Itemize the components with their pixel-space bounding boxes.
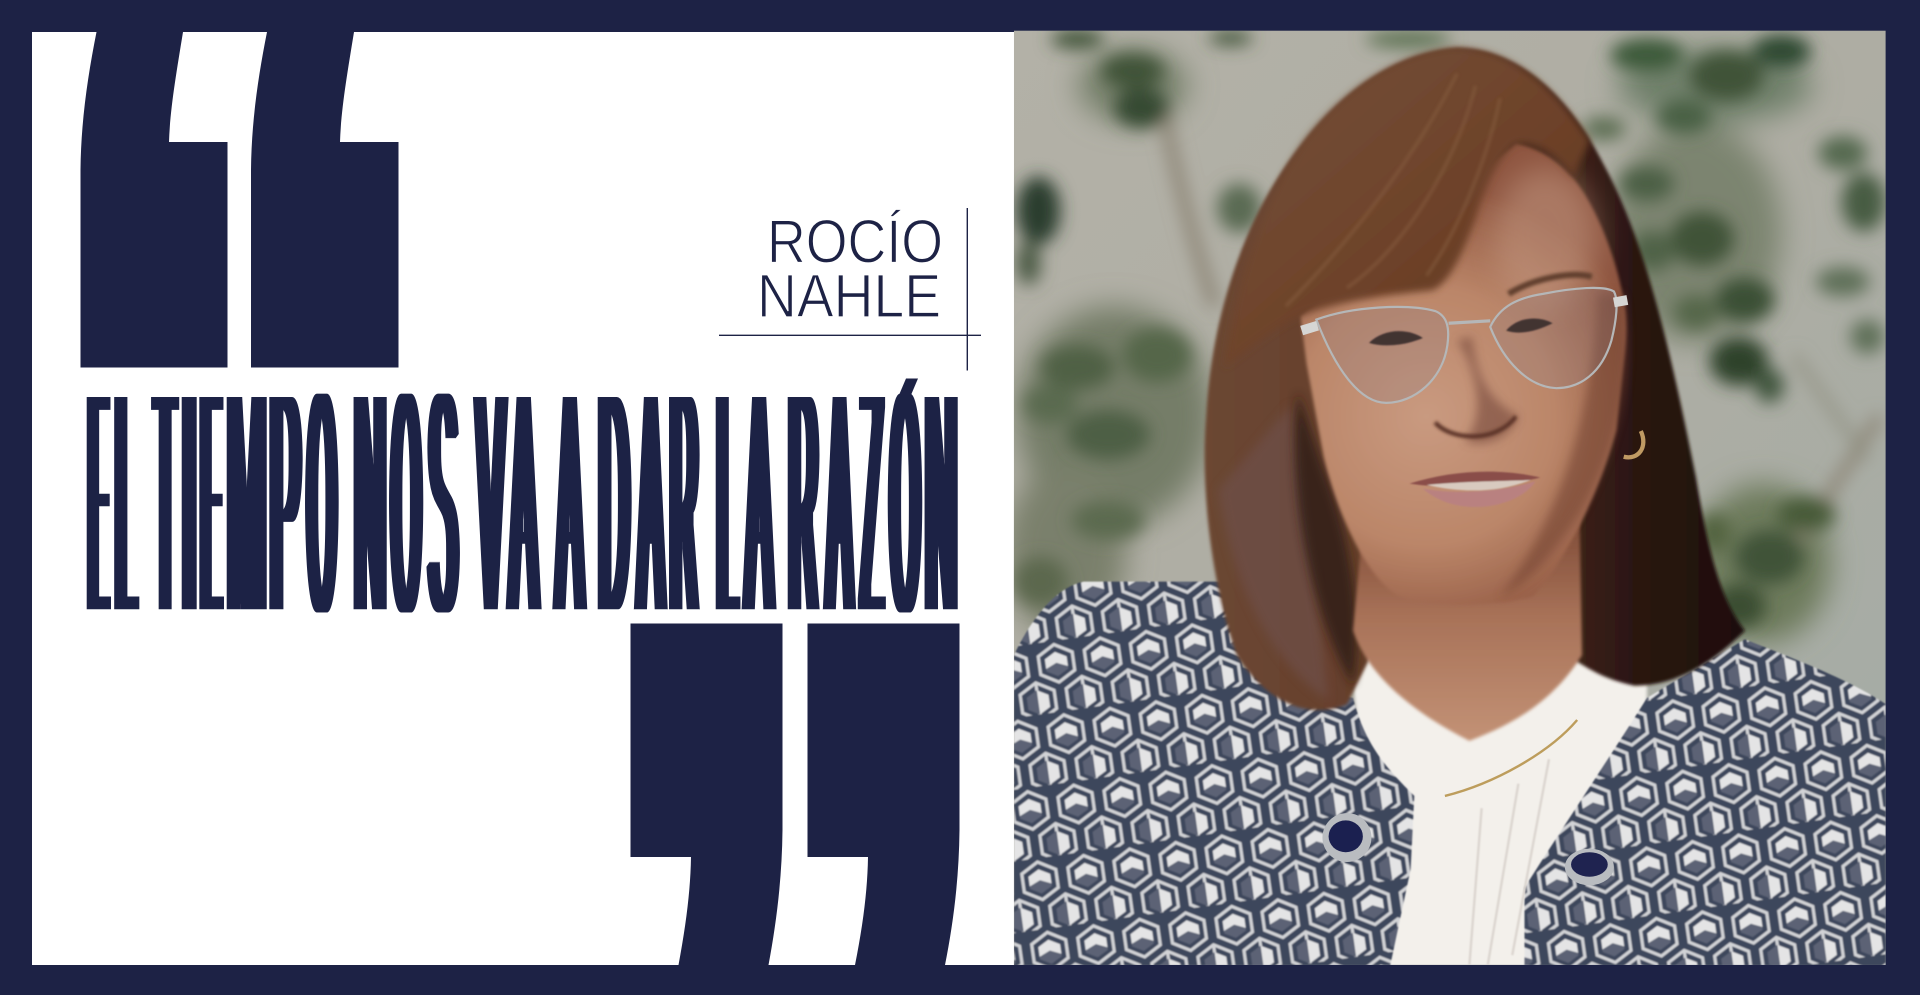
name: Rocío Nahle: ROCÍO xyxy=(767,208,943,276)
headline quote: R xyxy=(671,321,697,685)
patterned jacket left xyxy=(1014,582,1414,967)
neck xyxy=(1353,514,1582,741)
headline quote: A xyxy=(746,321,772,685)
right eye xyxy=(1506,318,1553,333)
nostrils xyxy=(1435,416,1516,436)
face xyxy=(1224,48,1643,605)
headline quote: A xyxy=(638,321,664,685)
name: Rocío Nahle: NAHLE xyxy=(757,262,941,331)
text: Z xyxy=(862,321,882,685)
hair back silhouette xyxy=(1205,48,1745,710)
photo wall background xyxy=(1014,31,1886,965)
left eye xyxy=(1369,331,1423,345)
patterned jacket right xyxy=(1525,639,1886,967)
headline quote: D xyxy=(599,321,629,685)
hair dark inner shadow xyxy=(1295,392,1357,686)
name: Rocío Nahle xyxy=(757,208,943,331)
text: Ó xyxy=(891,321,919,685)
headline quote: E xyxy=(202,321,220,685)
headline quote: O xyxy=(308,321,335,685)
jacket button left xyxy=(1322,813,1371,862)
nose shadow xyxy=(1457,337,1518,444)
headline quote: A xyxy=(510,321,538,685)
forehead highlight xyxy=(1494,168,1597,310)
hair fringe xyxy=(1224,48,1589,367)
mouth xyxy=(1409,472,1540,507)
panel: portrait photo illustration xyxy=(1004,29,1886,967)
face side shadow xyxy=(1500,294,1627,598)
headline quote: R xyxy=(790,321,817,685)
white blouse xyxy=(1353,660,1649,965)
glasses xyxy=(1302,288,1627,403)
foliage leaves and branches xyxy=(1014,29,1886,628)
headline quote: E xyxy=(90,321,107,685)
headline quote: P xyxy=(271,321,300,685)
headline quote xyxy=(86,394,958,612)
name crosshair rule xyxy=(719,208,981,370)
headline quote: M xyxy=(228,321,265,685)
jacket button right xyxy=(1565,849,1614,885)
icon: closing quotation marks xyxy=(630,624,960,965)
headline quote: L xyxy=(718,321,737,685)
text: N xyxy=(926,321,956,685)
headline quote: T xyxy=(155,321,175,685)
blouse lower pleats and necklace xyxy=(1445,720,1577,965)
headline quote: A xyxy=(827,321,852,685)
jacket and blouse xyxy=(1014,582,1886,967)
white quote panel xyxy=(32,32,1014,965)
soft foliage wash xyxy=(1004,49,1831,643)
right eyebrow xyxy=(1509,275,1592,294)
headline quote: V xyxy=(477,321,505,685)
headline quote: O xyxy=(392,321,420,685)
icon: opening quotation marks xyxy=(80,32,398,368)
headline quote: A xyxy=(557,321,583,685)
headline quote: N xyxy=(355,321,385,685)
headline quote: L xyxy=(116,321,135,685)
hair lower left shading xyxy=(1218,404,1329,700)
headline accent mark xyxy=(899,378,918,395)
headline quote: I xyxy=(182,321,197,685)
earring xyxy=(1624,431,1643,457)
fringe strands xyxy=(1286,73,1500,306)
headline quote: S xyxy=(429,321,457,685)
